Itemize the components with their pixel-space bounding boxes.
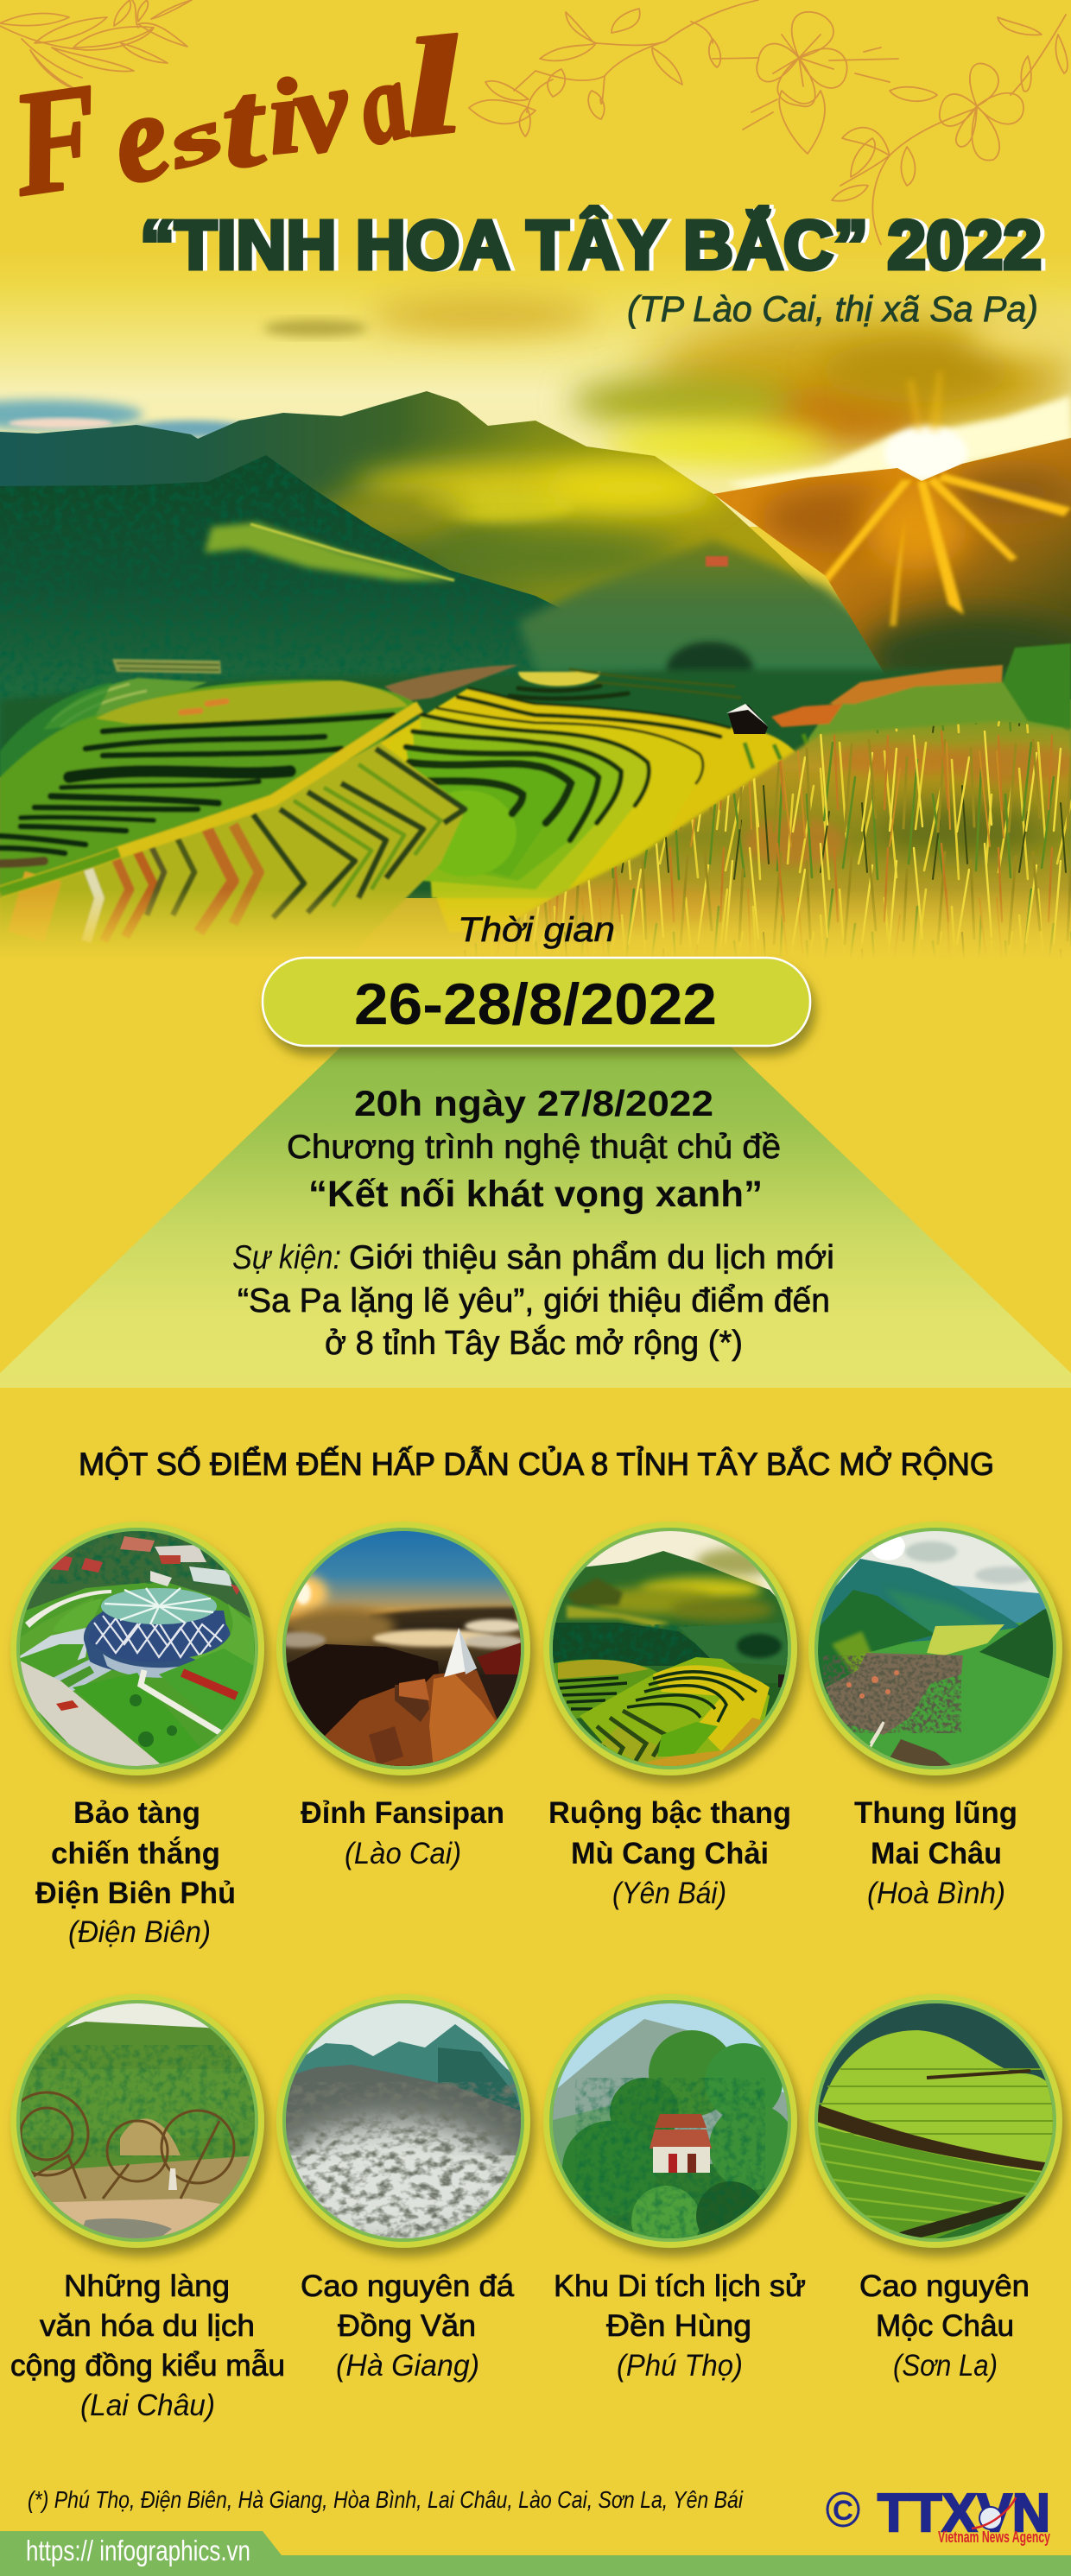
logo: TTXVN: C [833,2495,853,2526]
name [35,1796,236,1949]
photo: Fansipan summit [274,1522,530,1775]
footnote: (*) Phú Thọ, Điện Biên, Hà Giang, Hòa Bình, Lai Châu, Lào Cai, Sơn La, Yên Bái [28,2486,744,2513]
subtitle: location: (TP Lào Cai, thị xã Sa Pa) [627,288,1038,329]
name: (Lào Cai) [345,1837,461,1870]
far terrace orange [384,665,518,701]
footer bar with URL: https:// infographics.vn [26,2535,250,2567]
decorative floral top left [0,0,192,92]
name [301,1796,504,1870]
name: văn hóa du lịch [40,2309,255,2343]
logo: TTXVN: TTXVN [878,2484,1050,2543]
title: Festival brush lettering: a [345,37,420,169]
destination: Ruộng bậc thang Mù Cang Chải [543,1522,797,1910]
name: (Phú Thọ) [617,2349,743,2383]
text block: art programme [287,1083,781,1215]
text block: art programme: Chương trình nghệ thuật chủ đề [287,1129,781,1166]
destination: Bảo tàng chiến thắng Điện Biên Phủ [10,1522,264,1949]
name: Cao nguyên đá [301,2269,515,2303]
text block: event description: Sự kiện: [232,1239,341,1276]
text block: art programme: “Kết nối khát vọng xanh” [308,1174,763,1215]
name: Điện Biên Phủ [35,1877,236,1910]
name [859,2269,1030,2383]
name [554,2269,806,2383]
destination: Đỉnh Fansipan [274,1522,530,1870]
name: Mù Cang Chải [571,1837,769,1870]
far mountain ridge [0,391,864,777]
text block: event description: ở 8 tỉnh Tây Bắc mở rộng (*) [325,1325,743,1362]
decorative floral top right [469,0,1068,244]
name: chiến thắng [51,1836,220,1870]
text block: art programme: 20h ngày 27/8/2022 [354,1083,713,1123]
date pill [263,958,810,1046]
name: (Lai Châu) [80,2389,215,2422]
name: (Điện Biên) [68,1915,211,1949]
text block: event description [232,1239,834,1362]
title: Festival brush lettering: l [395,7,470,167]
destination: Cao nguyên Mộc Châu [808,1994,1062,2383]
name: (Hoà Bình) [867,1877,1005,1910]
destination: Những làng văn hóa du lịch [5,1994,285,2422]
name: Khu Di tích lịch sử [554,2269,806,2303]
name [10,2269,285,2422]
name: Mai Châu [871,1837,1002,1870]
photo: Hung temple [543,1994,797,2255]
name: Đền Hùng [606,2309,751,2343]
title: Festival brush lettering [2,7,470,227]
name [548,1796,791,1910]
panel: hero landscape photo [0,250,1071,1005]
date pill: 26-28/8/2022 [354,972,717,1037]
name [854,1796,1017,1910]
title: Festival brush lettering: F [2,51,110,227]
photo: water wheels village [5,1994,264,2248]
title: event name: “TINH HOA TÂY BẮC” 2022 [140,206,1042,283]
right hillside and path [808,682,1071,777]
name: Những làng [64,2269,230,2303]
title: Festival brush lettering: e [98,65,182,212]
name: Mộc Châu [876,2309,1014,2343]
mid valley fields [518,540,898,717]
sky clouds [0,296,1071,492]
right mountain [713,438,1071,699]
photo: museum [10,1522,264,1775]
label: time: Thời gian [458,911,615,949]
name: cộng đồng kiểu mẫu [10,2349,285,2383]
name: (Hà Giang) [336,2349,479,2383]
name: Ruộng bậc thang [548,1796,791,1830]
photo: rocky plateau [274,1994,530,2248]
name: (Yên Bái) [612,1877,726,1910]
left mound [0,680,420,892]
terraced fields base [0,669,1071,915]
panel: green pyramid [0,1047,1071,1388]
forest [0,455,605,777]
text block: event description: Giới thiệu sản phẩm du lịch mới [349,1239,834,1276]
name: Thung lũng [854,1796,1017,1830]
destination: Thung lũng Mai Châu [808,1522,1062,1910]
title: Festival brush lettering: t [215,54,274,194]
destination: Cao nguyên đá Đồng Văn [274,1994,530,2383]
photo: valley [808,1522,1062,1775]
photo: tea hills [808,1994,1062,2248]
name: Đỉnh Fansipan [301,1796,504,1830]
lower-left chevron terraces [0,706,466,976]
text block: event description: “Sa Pa lặng lẽ yêu”, giới thiệu điểm đến [238,1282,830,1320]
section heading: MỘT SỐ ĐIỂM ĐẾN HẤP DẪN CỦA 8 TỈNH TÂY BẮC MỞ RỘNG [79,1446,994,1482]
title: Festival brush lettering: s [157,92,233,185]
hut [728,705,768,734]
name: Bảo tàng [73,1796,200,1830]
title: event name: “TINH HOA TÂY BẮC” 2022 [144,206,1046,283]
footer bar with URL [0,2531,1071,2576]
name: Cao nguyên [859,2269,1030,2303]
title: Festival brush lettering: i [262,56,306,177]
name: Đồng Văn [338,2309,476,2343]
name [301,2269,515,2383]
golden rice grass [406,721,1071,984]
photo: rice terraces [543,1522,797,1775]
destination: Khu Di tích lịch sử Đền Hùng [543,1994,806,2383]
sun rays [821,473,1071,626]
title: Festival brush lettering: v [284,41,359,180]
central hook terraces [380,669,808,933]
name: (Sơn La) [893,2349,998,2383]
